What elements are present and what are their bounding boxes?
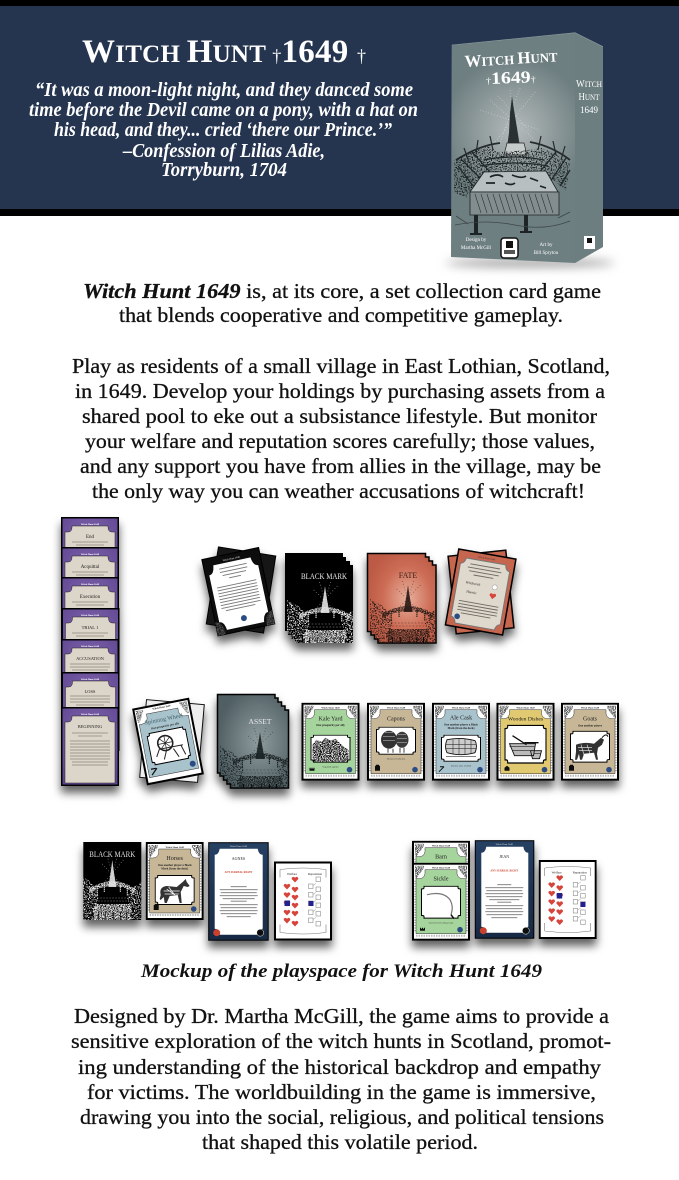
purple event card column: Witch Hunt 1649 [81, 713, 100, 716]
asset deck: ASSET [249, 717, 272, 726]
black mark deck: BLACK MARK [301, 572, 347, 581]
asset card: Ale Cask [432, 703, 490, 781]
asset card: Kale Yard [302, 703, 360, 781]
rotated fate cards [445, 549, 516, 635]
purple event card column: ACCUSATION [76, 656, 105, 661]
spinning wheel cards: Spinning Wheel [144, 713, 184, 727]
purple event card column: Witch Hunt 1649 [81, 553, 100, 556]
box spine text: 1649 [580, 105, 598, 115]
quote: Torryburn, 1704 [161, 159, 287, 181]
intro paragraph [83, 279, 601, 327]
asset card: Wooden Dishes: Witch Hunt 1649 [516, 707, 535, 710]
character card: Agnes: AGNES [232, 856, 245, 861]
asset card: Ale Cask: One another player a Black [444, 723, 478, 727]
asset card: Wooden Dishes [496, 703, 554, 781]
box credits: Martha McGill [461, 246, 492, 251]
tracking sheet 1 [274, 862, 332, 940]
intro paragraph: that blends cooperative and competitive gameplay. [119, 303, 563, 327]
stacked asset cards: Barn and Sickle: Used for harvesting crops [429, 922, 453, 925]
purple event card column: LOSS [85, 689, 96, 694]
box credits: Art by [540, 243, 553, 248]
asset card: Horses: One another player a Black [158, 863, 192, 867]
spinning wheel cards: One prosperity per ally [150, 721, 180, 730]
quote: his head, and they... cried ‘there our Prince.’” [54, 119, 392, 141]
asset card: Horses: Mark (from the deck) [161, 866, 188, 870]
closing paragraph: drawing you into the social, religious, and political tensions [80, 1105, 604, 1129]
box credits [461, 238, 559, 256]
description paragraph: your welfare and reputation scores carefully; those values, [85, 429, 595, 453]
asset card: Kale Yard: One prosperity per ally [316, 723, 345, 727]
rotated fate cards: Witch Hunt 1649 [478, 556, 496, 562]
quote [29, 79, 418, 181]
asset card: Capons [367, 703, 425, 781]
closing paragraph: Designed by Dr. Martha McGill, the game aims to provide a [74, 1004, 609, 1028]
rotated black mark cards [202, 547, 276, 636]
description paragraph: Play as residents of a small village in East Lothian, Scotland, [72, 354, 610, 378]
quote: –Confession of Lilias Adie, [122, 140, 325, 162]
asset card: Kale Yard: Witch Hunt 1649 [321, 707, 340, 710]
box title: †1649 † [485, 67, 537, 88]
purple event card column: Witch Hunt 1649 [81, 614, 100, 617]
box title: WITCH HUNT [464, 46, 558, 71]
asset card: Horses: Horses [166, 856, 184, 862]
asset card: Horses [146, 842, 204, 920]
description paragraph: the only way you can weather accusations of witchcraft! [92, 479, 585, 503]
stacked asset cards: Barn and Sickle: Sickle [434, 877, 449, 883]
asset card: Kale Yard: Kale Yard [318, 717, 342, 723]
stacked asset cards: Barn and Sickle: Barn [435, 855, 447, 861]
asset card: Ale Cask: Mark (from the deck) [448, 726, 474, 730]
caption: Mockup of the playspace for Witch Hunt 1649 [140, 961, 543, 982]
purple event card column [61, 517, 120, 786]
purple event card column: Witch Hunt 1649 [81, 678, 100, 681]
stacked asset cards: Barn and Sickle [412, 841, 470, 941]
box title [464, 46, 558, 88]
asset card: Horses: Witch Hunt 1649 [166, 846, 185, 849]
rotated fate cards: Heretic [466, 590, 477, 595]
asset card: Ale Cask: Used to store alcohol [451, 765, 471, 768]
spinning wheel cards [132, 698, 204, 785]
character card: Agnes [209, 843, 268, 940]
purple event card column: Acquittal [81, 565, 100, 570]
purple event card column: Witch Hunt 1649 [81, 583, 100, 586]
character card: Agnes: ANY SURREAL RIGHT [225, 871, 253, 874]
stacked asset cards: Barn and Sickle: Witch Hunt 1649 [432, 845, 451, 848]
box spine text: HUNT [578, 92, 600, 103]
closing paragraph: sensitive exploration of the witch hunts in Scotland, promot- [71, 1029, 611, 1053]
box credits: Design by [466, 238, 487, 243]
tracking sheet 2 [539, 860, 597, 939]
character card: Jean [475, 841, 534, 938]
title: WITCH HUNT †1649 † [82, 34, 366, 70]
character card: Jean: Witch Hunt 1649 [496, 843, 514, 846]
asset card: Goats [561, 703, 619, 781]
asset card: Capons: Capons [387, 717, 406, 723]
asset card: Ale Cask: Witch Hunt 1649 [452, 707, 471, 710]
rotated black mark cards: Witch Hunt 1649 [223, 556, 241, 562]
character card: Jean: ANY SURREAL RIGHT [490, 870, 518, 873]
description paragraph: in 1649. Develop your holdings by purchasing assets from a [75, 379, 605, 403]
quote: time before the Devil came on a pony, with a hat on [29, 99, 418, 121]
asset card: Goats: Goats [583, 717, 598, 723]
asset card: Goats: One another player [578, 724, 603, 728]
publisher logo [501, 238, 518, 258]
closing paragraph [71, 1004, 611, 1154]
purple event card column: TRIAL 1 [82, 625, 99, 630]
stacked asset cards: Barn and Sickle: Witch Hunt 1649 [432, 867, 451, 870]
purple event card column: Execution [80, 595, 101, 600]
black mark card in playspace: BLACK MARK [89, 850, 135, 859]
asset card: Capons: Neutered cockerels [387, 758, 405, 761]
character card: Jean: JEAN [499, 854, 509, 859]
intro paragraph: Witch Hunt 1649 is, at its core, a set collection card game [83, 279, 601, 303]
game box [445, 33, 615, 267]
asset card: Wooden Dishes: Wooden Dishes [508, 717, 543, 723]
closing paragraph: that shaped this volatile period. [202, 1130, 478, 1154]
asset card: Kale Yard: Vegetable garden [322, 766, 340, 769]
purple event card column: End [86, 535, 95, 540]
fate deck: FATE [399, 571, 417, 580]
rotated fate cards: Witchcraft [465, 580, 481, 587]
asset card: Capons: Witch Hunt 1649 [387, 707, 406, 710]
fate deck [368, 554, 446, 645]
header band [0, 0, 679, 216]
asset card: Goats: Witch Hunt 1649 [581, 707, 600, 710]
box credits: Bill Sprytou [534, 251, 559, 256]
closing paragraph: ing understanding of the historical backdrop and empathy [78, 1055, 601, 1079]
description paragraph [72, 354, 610, 503]
box spine text: WITCH [576, 79, 602, 90]
description paragraph: shared pool to eke out a subsistance lifestyle. But monitor [82, 404, 597, 428]
purple event card column: BEGINNING [78, 724, 103, 729]
asset deck [218, 694, 300, 792]
purple event card column: Witch Hunt 1649 [81, 523, 100, 526]
box engraving [454, 88, 570, 234]
black mark deck [285, 553, 363, 646]
description paragraph: and any support you have from allies in the village, may be [80, 454, 601, 478]
box spine text [576, 79, 602, 249]
spinning wheel cards: Witch Hunt 1649 [152, 704, 171, 711]
quote: “It was a moon-light night, and they danced some [35, 79, 413, 101]
purple event card column: Witch Hunt 1649 [81, 645, 100, 648]
character card: Agnes: Witch Hunt 1649 [230, 845, 248, 848]
asset card: Ale Cask: Ale Cask [450, 716, 472, 722]
black mark card in playspace [78, 842, 146, 920]
closing paragraph: for victims. The worldbuilding in the game is immersive, [87, 1080, 596, 1104]
